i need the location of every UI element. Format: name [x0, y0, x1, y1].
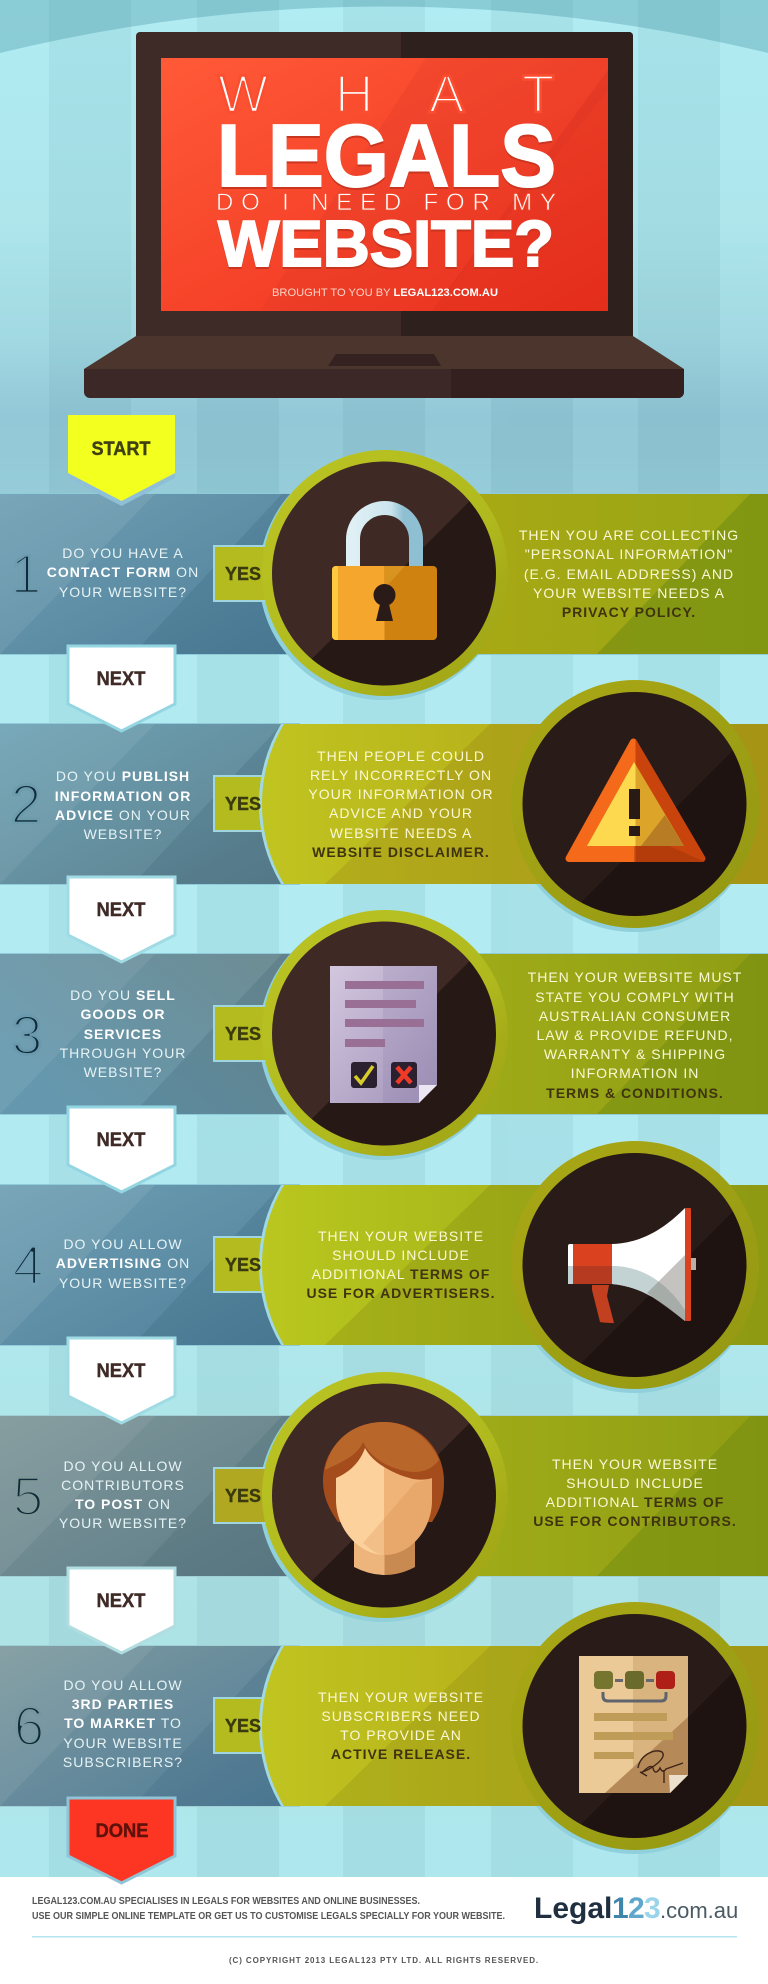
next arrow 1	[68, 646, 175, 731]
question text: DO YOU SELL	[70, 987, 176, 1003]
done arrow	[68, 1798, 175, 1883]
answer text: AUSTRALIAN CONSUMER	[539, 1008, 731, 1024]
start arrow	[68, 415, 175, 506]
row 2	[0, 680, 768, 932]
answer text: WEBSITE DISCLAIMER.	[312, 844, 490, 860]
question text: TO POST ON	[75, 1496, 171, 1512]
start arrow: START	[92, 439, 151, 460]
question text: YOUR WEBSITE	[63, 1735, 183, 1751]
top arc	[0, 0, 768, 53]
answer text: INFORMATION IN	[571, 1065, 699, 1081]
question text: DO YOU ALLOW	[63, 1236, 183, 1252]
question text: YOUR WEBSITE?	[59, 584, 187, 600]
question band	[0, 723, 300, 885]
question text: TO MARKET TO	[64, 1715, 182, 1731]
done arrow: DONE	[96, 1821, 148, 1842]
laptop	[84, 32, 684, 398]
answer band	[450, 1415, 768, 1577]
yes tab	[214, 546, 274, 601]
answer text: ACTIVE RELEASE.	[331, 1746, 471, 1762]
laptop base deck	[84, 336, 684, 369]
icon: warning triangle	[569, 742, 705, 862]
question text: DO YOU PUBLISH	[56, 768, 190, 784]
logo: 2	[628, 1892, 645, 1925]
question band	[0, 1645, 300, 1807]
title: WHAT: WHAT	[218, 65, 554, 124]
icon: megaphone	[568, 1208, 696, 1323]
question band	[0, 1415, 300, 1577]
answer band	[450, 493, 768, 655]
footer text: LEGAL123.COM.AU SPECIALISES IN LEGALS FOR WEBSITES AND ONLINE BUSINESSES.	[32, 1895, 420, 1907]
question text: ADVICE ON YOUR	[55, 807, 191, 823]
number 6: 6	[14, 1695, 44, 1757]
copyright: (C) COPYRIGHT 2013 LEGAL123 PTY LTD. ALL RIGHTS RESERVED.	[229, 1956, 539, 1965]
screen facet	[260, 58, 608, 311]
logo: 1	[612, 1892, 629, 1925]
question text: ADVERTISING ON	[56, 1255, 190, 1271]
next arrow 4: NEXT	[96, 1361, 146, 1382]
row 1	[0, 450, 768, 700]
answer text: USE FOR ADVERTISERS.	[306, 1285, 496, 1301]
number 1: 1	[11, 543, 41, 605]
answer text: SHOULD INCLUDE	[332, 1247, 470, 1263]
title: WEBSITE?: WEBSITE?	[218, 207, 554, 280]
next arrow 2: NEXT	[96, 900, 146, 921]
lid shaded half	[401, 32, 633, 336]
answer text: THEN YOUR WEBSITE MUST	[528, 969, 742, 985]
ring halo	[259, 912, 507, 1160]
ring halo	[259, 452, 507, 700]
badge ring	[511, 1141, 759, 1389]
touchpad	[328, 354, 441, 366]
answer text: PRIVACY POLICY.	[562, 604, 696, 620]
answer text: STATE YOU COMPLY WITH	[535, 989, 735, 1005]
answer text: ADVICE AND YOUR	[329, 805, 473, 821]
next arrow 3	[68, 1107, 175, 1192]
next arrow 5: NEXT	[96, 1591, 146, 1612]
question text: 3RD PARTIES	[72, 1696, 174, 1712]
question text: WEBSITE?	[84, 1064, 162, 1080]
next arrow 3: NEXT	[96, 1130, 146, 1151]
question text: CONTACT FORM ON	[47, 564, 199, 580]
question text: DO YOU ALLOW	[63, 1677, 183, 1693]
yes label: YES	[225, 1716, 261, 1736]
yes tab	[214, 1468, 274, 1523]
answer band	[259, 1646, 768, 1806]
next arrow 5	[68, 1568, 175, 1653]
footer text	[32, 1895, 505, 1922]
ring halo	[510, 1606, 758, 1854]
yes tab	[214, 1237, 274, 1292]
row 5	[0, 1372, 768, 1622]
question text: INFORMATION OR	[55, 788, 191, 804]
row 3	[0, 910, 768, 1160]
question text: SUBSCRIBERS?	[63, 1754, 183, 1770]
title: DO I NEED FOR MY: DO I NEED FOR MY	[216, 189, 556, 216]
answer text: WEBSITE NEEDS A	[330, 825, 472, 841]
badge ring	[511, 680, 759, 928]
next arrow 4	[68, 1338, 175, 1423]
yes label: YES	[225, 1486, 261, 1506]
answer text: (E.G. EMAIL ADDRESS) AND	[524, 566, 734, 582]
answer band	[259, 724, 768, 884]
question text: SERVICES	[84, 1026, 162, 1042]
next arrow 1: NEXT	[96, 669, 146, 690]
answer text: RELY INCORRECTLY ON	[310, 767, 492, 783]
question band	[0, 1184, 300, 1346]
badge ring	[262, 910, 508, 1156]
answer text: THEN YOUR WEBSITE	[552, 1456, 718, 1472]
answer text: TO PROVIDE AN	[340, 1727, 462, 1743]
number 3: 3	[12, 1004, 42, 1066]
ring halo	[259, 1374, 507, 1622]
next arrow 2	[68, 877, 175, 962]
laptop base front	[84, 369, 684, 398]
question text: DO YOU HAVE A	[62, 545, 184, 561]
badge ring	[262, 450, 508, 696]
yes tab	[214, 1006, 274, 1061]
answer text: YOUR WEBSITE NEEDS A	[533, 585, 725, 601]
number 5: 5	[13, 1465, 43, 1527]
answer text: THEN YOUR WEBSITE	[318, 1689, 484, 1705]
answer text: LAW & PROVIDE REFUND,	[536, 1027, 734, 1043]
answer text: "PERSONAL INFORMATION"	[525, 546, 733, 562]
answer text: YOUR INFORMATION OR	[308, 786, 494, 802]
icon: terms document	[330, 966, 437, 1103]
number 4: 4	[13, 1234, 43, 1296]
logo: .com.au	[660, 1898, 738, 1923]
row 4	[0, 1141, 768, 1393]
footer panel	[0, 1877, 768, 1984]
logo: 3	[644, 1892, 661, 1925]
answer text: ADDITIONAL TERMS OF	[546, 1494, 724, 1510]
divider	[32, 1936, 737, 1938]
number 2: 2	[11, 773, 41, 835]
answer text: THEN PEOPLE COULD	[317, 748, 485, 764]
yes label: YES	[225, 794, 261, 814]
icon: signed document	[579, 1656, 688, 1793]
question text: WEBSITE?	[84, 826, 162, 842]
yes tab	[214, 776, 274, 831]
footer text: USE OUR SIMPLE ONLINE TEMPLATE OR GET US TO CUSTOMISE LEGALS SPECIALLY FOR YOUR WEBSITE.	[32, 1910, 505, 1922]
ring halo	[510, 684, 758, 932]
question text: CONTRIBUTORS	[61, 1477, 185, 1493]
title: LEGALS: LEGALS	[217, 106, 556, 205]
base front shaded half	[451, 369, 684, 398]
question band	[0, 493, 300, 655]
red screen	[161, 58, 608, 311]
yes label: YES	[225, 564, 261, 584]
brought to you by: BROUGHT TO YOU BY LEGAL123.COM.AU	[272, 287, 498, 299]
answer text: THEN YOU ARE COLLECTING	[519, 527, 739, 543]
logo: Legal	[534, 1892, 612, 1925]
answer text: SHOULD INCLUDE	[566, 1475, 704, 1491]
question text: GOODS OR	[80, 1006, 166, 1022]
yes label: YES	[225, 1024, 261, 1044]
question text: YOUR WEBSITE?	[59, 1275, 187, 1291]
answer text: THEN YOUR WEBSITE	[318, 1228, 484, 1244]
answer text: SUBSCRIBERS NEED	[321, 1708, 481, 1724]
ring halo	[510, 1145, 758, 1393]
answer band	[450, 953, 768, 1115]
answer band	[259, 1185, 768, 1345]
screen facet right	[432, 70, 608, 311]
question text: DO YOU ALLOW	[63, 1458, 183, 1474]
badge ring	[262, 1372, 508, 1618]
icon: face	[323, 1422, 444, 1575]
yes tab	[214, 1698, 274, 1753]
answer text: WARRANTY & SHIPPING	[544, 1046, 726, 1062]
yes label: YES	[225, 1255, 261, 1275]
question text: YOUR WEBSITE?	[59, 1515, 187, 1531]
row 6	[0, 1602, 768, 1854]
answer text: USE FOR CONTRIBUTORS.	[533, 1513, 737, 1529]
icon: padlock	[332, 508, 437, 640]
answer text: ADDITIONAL TERMS OF	[312, 1266, 490, 1282]
badge ring	[511, 1602, 759, 1850]
question text: THROUGH YOUR	[60, 1045, 186, 1061]
question band	[0, 953, 300, 1115]
laptop lid	[136, 32, 633, 336]
answer text: TERMS & CONDITIONS.	[546, 1085, 724, 1101]
